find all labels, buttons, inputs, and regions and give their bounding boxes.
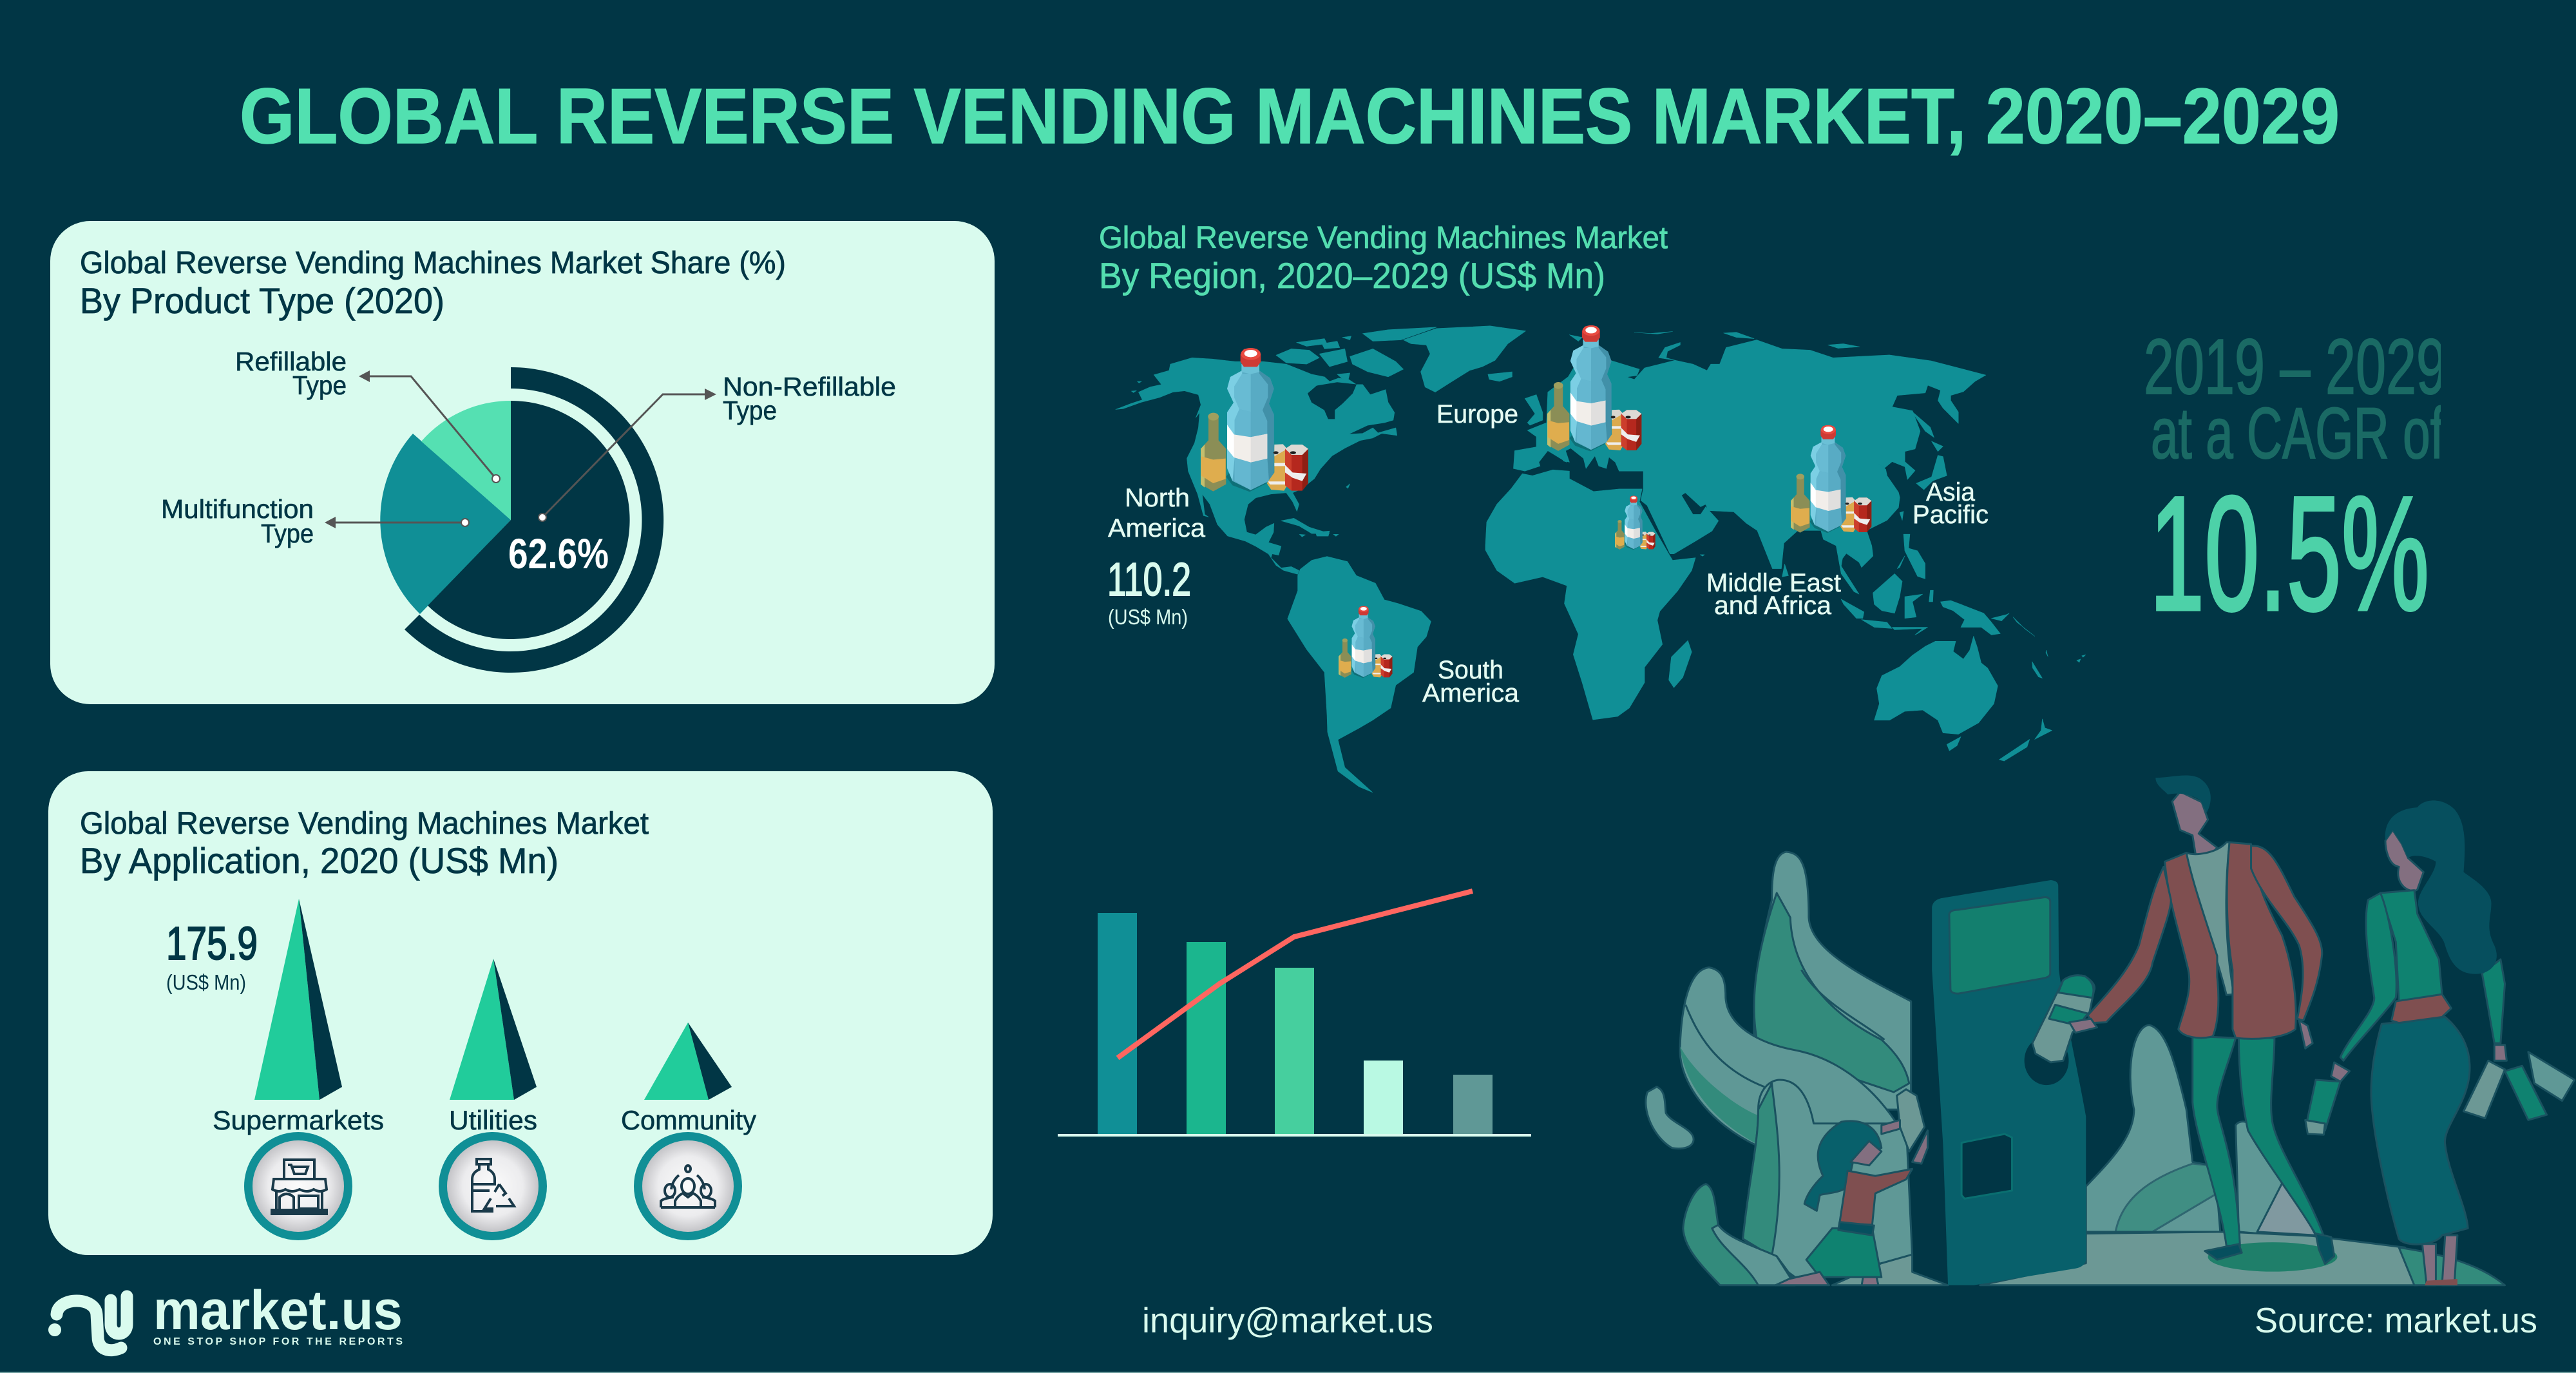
value: 110.2: 110.2 <box>1107 554 1191 606</box>
child <box>1775 1090 1927 1285</box>
map labels: South <box>1438 656 1503 684</box>
title: GLOBAL REVERSE VENDING MACHINES MARKET, 2020–2029 <box>240 72 2340 160</box>
segment labels: Refillable <box>235 347 347 376</box>
panel heading: application: Global Reverse Vending Machines Market <box>80 807 649 841</box>
icon: recycled bottle <box>443 1137 542 1236</box>
europe, asia, africa <box>1485 332 1986 720</box>
bottles: south america <box>1339 606 1393 678</box>
woman <box>2305 800 2575 1285</box>
panel heading: product type: Global Reverse Vending Machines Market Share (%) <box>80 246 786 280</box>
man <box>2032 775 2334 1264</box>
CAGR callout <box>2146 338 2441 613</box>
pacific islands and australia <box>1841 410 2086 761</box>
panel heading: product type: By Product Type (2020) <box>80 280 444 321</box>
segment labels: Multifunction <box>161 494 314 524</box>
application labels: Community <box>621 1105 756 1135</box>
americas and greenland <box>1116 326 1525 792</box>
application labels: Utilities <box>449 1105 537 1135</box>
segment labels: Type <box>292 370 347 400</box>
pyramid: utilities <box>450 959 537 1100</box>
source: Source: market.us <box>2255 1300 2537 1340</box>
map labels: North <box>1125 484 1190 512</box>
heading: by region <box>1099 221 1668 296</box>
heading: by region: Global Reverse Vending Machines Market <box>1099 221 1668 255</box>
leaves <box>1646 852 2316 1285</box>
value: 175.9: (US$ Mn) <box>166 970 246 994</box>
map labels: and Africa <box>1714 591 1832 620</box>
map labels: Middle East <box>1706 569 1841 597</box>
segment labels <box>161 347 896 548</box>
bottles: asia pacific <box>1791 425 1871 533</box>
bottles: north america <box>1201 348 1308 492</box>
bottles: middle east and africa <box>1615 495 1655 550</box>
pyramid: supermarkets <box>254 899 342 1100</box>
value: 110.2 <box>1107 554 1191 629</box>
segment labels: Type <box>261 519 314 548</box>
arrows and dots <box>325 370 716 528</box>
panel heading: application: By Application, 2020 (US$ Mn) <box>80 840 558 881</box>
value: 175.9 <box>166 918 258 994</box>
panel heading: product type <box>80 246 786 321</box>
panel: market share by product type <box>50 221 995 704</box>
leader lines <box>330 376 712 523</box>
machine <box>1932 880 2086 1285</box>
value: 110.2: (US$ Mn) <box>1108 605 1188 629</box>
bottles: europe <box>1547 325 1641 452</box>
map labels: America <box>1422 679 1520 707</box>
world map <box>1116 326 2086 792</box>
CAGR callout: at a CAGR of <box>2151 393 2445 474</box>
value: 175.9: 175.9 <box>166 918 258 970</box>
application labels: Supermarkets <box>213 1105 384 1135</box>
pie chart: product type share <box>380 367 663 673</box>
heading: by region: By Region, 2020–2029 (US$ Mn) <box>1099 255 1605 296</box>
logo <box>48 1280 403 1350</box>
pyramid: community <box>644 1023 732 1100</box>
segment labels: Non-Refillable <box>723 372 896 401</box>
icon: community <box>638 1137 738 1236</box>
application labels <box>213 1105 756 1135</box>
logo text: market.us <box>153 1280 403 1341</box>
panel heading: application <box>80 807 649 881</box>
logo: ONE STOP SHOP FOR THE REPORTS <box>153 1336 403 1347</box>
ground <box>1832 1232 2505 1285</box>
icon: supermarket <box>249 1137 348 1236</box>
map labels: Asia <box>1926 478 1976 506</box>
map labels <box>1108 400 1989 707</box>
segment labels: Type <box>723 396 777 425</box>
illustration: people recycling at reverse vending machine <box>1646 775 2575 1285</box>
map labels: Pacific <box>1913 501 1989 529</box>
map labels: America <box>1108 514 1206 542</box>
value label: 62.6% <box>508 530 609 577</box>
map labels: Europe <box>1436 400 1518 428</box>
CAGR callout: 2019 – 2029 <box>2144 323 2447 410</box>
logo mark <box>48 1296 127 1350</box>
panel: by application <box>48 771 993 1255</box>
contact email: inquiry@market.us <box>1142 1300 1433 1340</box>
bar and line chart <box>1058 891 1531 1137</box>
